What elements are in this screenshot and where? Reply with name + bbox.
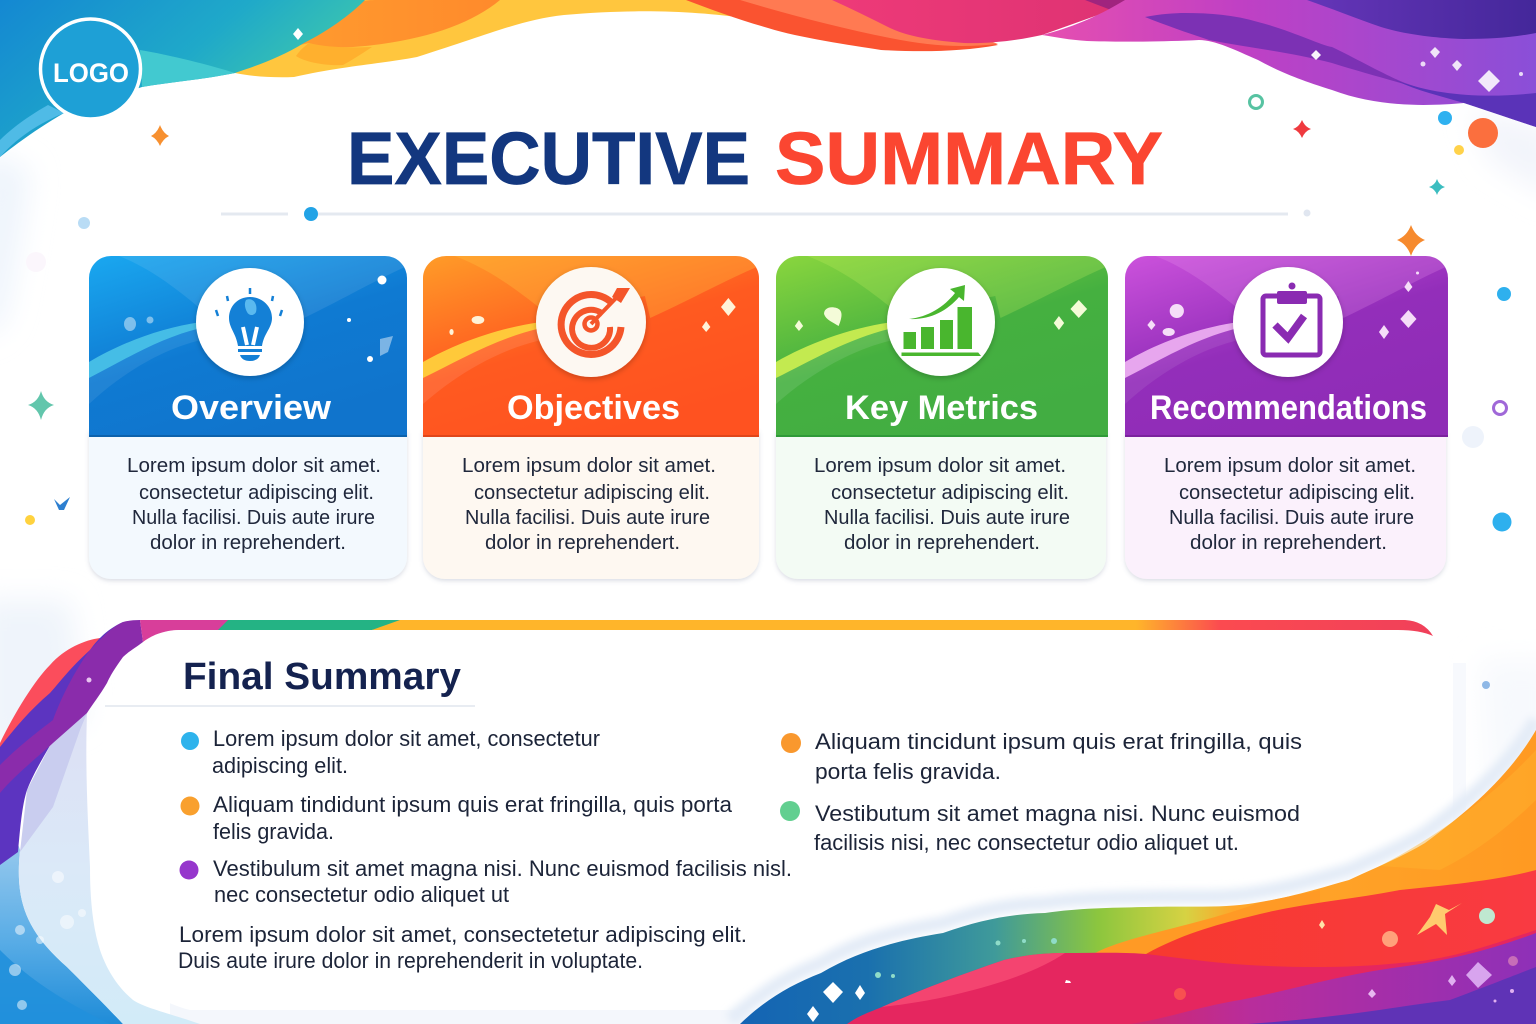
- heading: Overview: Overview: [171, 389, 332, 427]
- right bullet list: [780, 729, 1302, 855]
- closing paragraph: Duis aute irure dolor in reprehenderit in voluptate.: [178, 948, 643, 973]
- title: SUMMARY: [775, 117, 1163, 200]
- left bullet list: felis gravida.: [213, 819, 334, 844]
- wave halo: [730, 720, 1536, 1020]
- card body: overview: dolor in reprehendert.: [150, 532, 346, 554]
- card body: key metrics: consectetur adipiscing elit.: [831, 482, 1069, 504]
- soft edge tints: [0, 110, 1536, 820]
- top wave sparkles: [293, 28, 1523, 92]
- left bullet list: Vestibulum sit amet magna nisi. Nunc euismod facilisis nisl.: [213, 856, 792, 881]
- heading: Key Metrics: Key Metrics: [845, 389, 1038, 427]
- card body: recommendations: consectetur adipiscing elit.: [1179, 482, 1415, 504]
- card body: objectives: [423, 430, 759, 579]
- closing paragraph: [178, 922, 747, 973]
- icon: light bulb: [196, 268, 304, 376]
- panel: Objectives card: [423, 256, 759, 579]
- card body: recommendations: Lorem ipsum dolor sit amet.: [1164, 455, 1416, 477]
- right bullet list: facilisis nisi, nec consectetur odio aliquet ut.: [814, 830, 1239, 855]
- left bullet list: Lorem ipsum dolor sit amet, consectetur: [213, 726, 600, 751]
- card body: overview: Lorem ipsum dolor sit amet.: [127, 455, 381, 477]
- card body: overview: [89, 430, 407, 579]
- title divider: [221, 207, 1310, 221]
- left bullet list: Aliquam tindidunt ipsum quis erat fringilla, quis porta: [213, 792, 733, 817]
- panel side edge tint: [1453, 663, 1466, 842]
- panel: Final Summary: [105, 620, 1433, 973]
- right bullet list: Aliquam tincidunt ipsum quis erat fringilla, quis: [815, 729, 1302, 754]
- left bullet list: [180, 726, 792, 907]
- right bullet list: Vestibutum sit amet magna nisi. Nunc euismod: [815, 801, 1300, 826]
- heading: Objectives: Objectives: [507, 389, 680, 427]
- summary white panel: [100, 630, 1452, 1024]
- decorative sparkles and dots: [25, 96, 1512, 689]
- panel: Overview card: [89, 256, 407, 579]
- title: EXECUTIVE: [347, 117, 750, 200]
- card body: objectives: dolor in reprehendert.: [485, 532, 680, 554]
- card body: overview: Nulla facilisi. Duis aute irure: [132, 507, 375, 529]
- logo badge: [40, 19, 140, 119]
- icon: rising bar chart: [887, 268, 995, 376]
- panel: Key Metrics card: [776, 256, 1108, 579]
- left bullet list: nec consectetur odio aliquet ut: [214, 882, 509, 907]
- card body: key metrics: Lorem ipsum dolor sit amet.: [814, 455, 1066, 477]
- panel: Recommendations card: [1125, 256, 1448, 579]
- card header: key metrics: [776, 256, 1108, 437]
- card header: overview: [89, 256, 407, 437]
- top wave ribbon: [0, 0, 1536, 157]
- left bullet list: adipiscing elit.: [212, 753, 348, 778]
- card body: objectives: Nulla facilisi. Duis aute irure: [465, 507, 710, 529]
- bottom-left wave ribbon: [0, 620, 232, 1024]
- card body: recommendations: [1125, 430, 1446, 579]
- icon: target with dart: [536, 267, 646, 377]
- card body: key metrics: dolor in reprehendert.: [844, 532, 1040, 554]
- card body: objectives: Lorem ipsum dolor sit amet.: [462, 455, 716, 477]
- card header: recommendations: [1125, 256, 1448, 437]
- bottom-right wave ribbon: [740, 730, 1536, 1024]
- heading: Recommendations: Recommendations: [1150, 389, 1427, 427]
- card body: recommendations: dolor in reprehendert.: [1190, 532, 1387, 554]
- icon: clipboard with check: [1233, 267, 1343, 377]
- card body: objectives: consectetur adipiscing elit.: [474, 482, 710, 504]
- heading: Final Summary: Final Summary: [183, 656, 461, 698]
- right bullet list: porta felis gravida.: [815, 759, 1001, 784]
- bottom pale strip: [170, 1000, 790, 1024]
- card body: key metrics: Nulla facilisi. Duis aute irure: [824, 507, 1070, 529]
- title: [347, 117, 1163, 200]
- card body: recommendations: Nulla facilisi. Duis aute irure: [1169, 507, 1414, 529]
- closing paragraph: Lorem ipsum dolor sit amet, consectetetur adipiscing elit.: [179, 922, 747, 947]
- card body: overview: consectetur adipiscing elit.: [139, 482, 374, 504]
- card header: objectives: [423, 256, 759, 437]
- card body: key metrics: [776, 430, 1106, 579]
- logo badge: LOGO: [53, 58, 129, 88]
- top rainbow strip: [218, 620, 1433, 636]
